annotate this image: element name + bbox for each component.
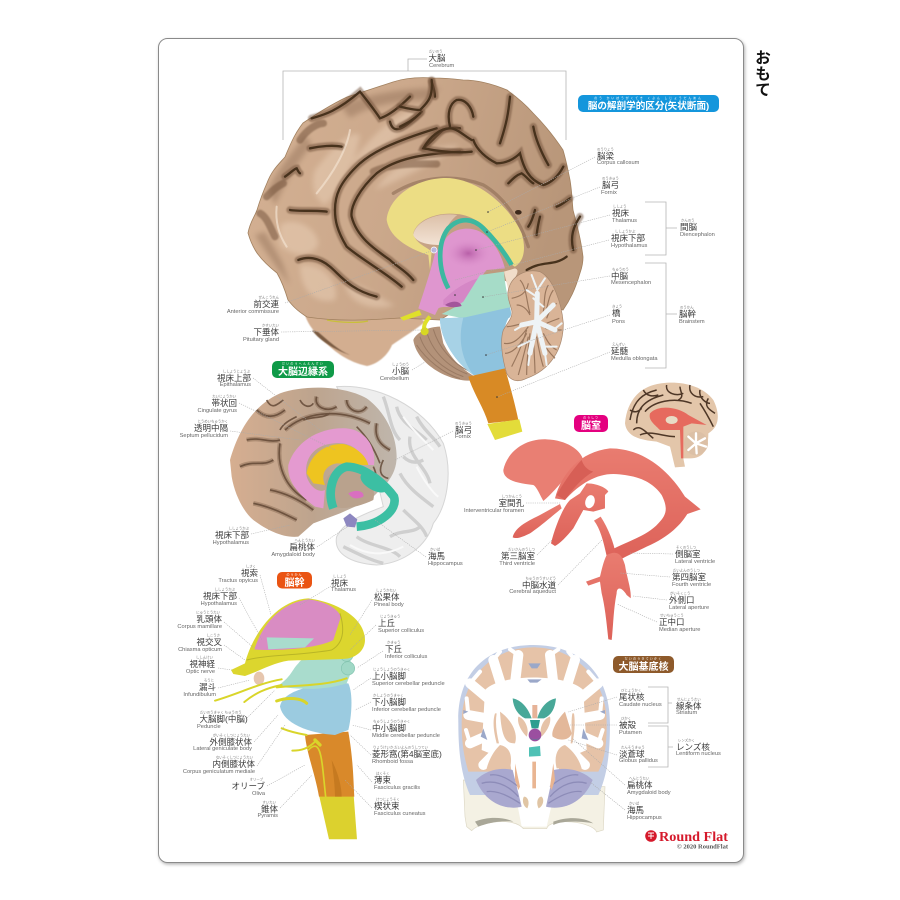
fourth ventricle and apertures bbox=[586, 553, 631, 640]
septum hollow bbox=[413, 214, 457, 245]
labels: brainstem left: Lateral geniculate body bbox=[193, 746, 252, 752]
anterior horn bbox=[513, 504, 562, 538]
labels: brainstem right: 下丘 bbox=[385, 644, 403, 654]
labels: brainstem left: しこうさ bbox=[206, 632, 220, 638]
cerebellar folia bbox=[504, 280, 562, 375]
sulci in right half bbox=[393, 80, 580, 270]
labels: ventricles: 正中口 bbox=[659, 617, 685, 627]
labels: main brain: 小脳 bbox=[392, 366, 409, 376]
heading: basal ganglia bbox=[613, 656, 674, 673]
labels: brainstem left: にゅうとうたい bbox=[196, 610, 221, 614]
labels: brainstem right: 上丘 bbox=[378, 618, 396, 628]
pons bbox=[440, 307, 511, 375]
labels: brainstem right: かきゅう bbox=[387, 640, 401, 644]
labels: brainstem left: Oliva bbox=[252, 791, 266, 797]
labels: brainstem left: Corpus geniculatum mediale bbox=[183, 769, 255, 775]
labels: brainstem left: 錐体 bbox=[261, 804, 278, 814]
labels: ventricles: Cerebral aqueduct bbox=[509, 589, 556, 595]
heading: basal ganglia: 大脳基底核 bbox=[618, 660, 668, 673]
labels: brainstem right: Middle cerebellar peduncle bbox=[372, 733, 440, 739]
labels: ventricles: だいさんのうしつ bbox=[508, 546, 536, 552]
inner thalamic pink bbox=[348, 491, 364, 498]
labels: main brain: 下垂体 bbox=[253, 327, 279, 337]
side label: front: お bbox=[755, 49, 771, 67]
third ventricle bbox=[551, 483, 608, 546]
cingulate ring bbox=[288, 428, 374, 508]
labels: brainstem left: Optic nerve bbox=[186, 669, 215, 675]
labels: main brain: Brainstem bbox=[679, 319, 705, 325]
labels: brainstem left: ないそくしつじょうたい bbox=[216, 754, 254, 760]
labels: ventricles: Interventricular foramen bbox=[464, 508, 524, 514]
arbor vitae bbox=[515, 275, 562, 365]
labels: limbic: 扁桃体 bbox=[289, 542, 315, 552]
labels: brainstem right: Inferior colliculus bbox=[385, 654, 428, 660]
brainstem bumps bbox=[523, 797, 543, 808]
labels: brainstem right: Inferior cerebellar peduncle bbox=[372, 707, 441, 713]
labels: brainstem right: 松果体 bbox=[374, 592, 400, 602]
labels: basal ganglia: Caudate nucleus bbox=[619, 702, 662, 708]
labels: basal ganglia: へんとうたい bbox=[629, 776, 650, 780]
labels: main brain: ししょう bbox=[613, 204, 627, 208]
beige tip bbox=[504, 268, 517, 290]
labels: main brain: Thalamus bbox=[612, 218, 637, 224]
labels: ventricles: しつかんこう bbox=[502, 494, 522, 498]
labels: main brain: かすいたい bbox=[262, 322, 280, 328]
lateral ventricle arch bbox=[555, 448, 701, 562]
cerebral aqueduct notch bbox=[445, 302, 462, 307]
logo: Round Flat bbox=[645, 829, 729, 850]
labels: ventricles: Fourth ventricle bbox=[672, 582, 711, 588]
teal ventricle bbox=[529, 720, 541, 740]
labels: main brain: 脳梁 bbox=[597, 151, 615, 161]
white cerebrum folds shade bbox=[343, 397, 440, 563]
pituitary bbox=[424, 317, 430, 332]
labels: main brain: Cerebrum bbox=[429, 63, 455, 69]
labels: limbic: Hippocampus bbox=[428, 561, 463, 567]
labels: brainstem left: オリーブ bbox=[250, 776, 264, 782]
illustration: inset brain with ventricles bbox=[625, 383, 718, 467]
labels: main brain: きょう bbox=[612, 304, 622, 308]
labels: brainstem right: けつじょうそく bbox=[376, 796, 400, 802]
labels: brainstem left: 視床下部 bbox=[203, 591, 237, 601]
labels: brainstem left: Peduncle bbox=[197, 724, 221, 730]
white cerebrum folds bbox=[350, 417, 438, 553]
labels: basal ganglia: かいば bbox=[629, 800, 640, 806]
labels: basal ganglia: Amygdaloid body bbox=[627, 790, 671, 796]
labels: main brain: ちゅうのう bbox=[612, 266, 629, 272]
labels: brainstem left: 乳頭体 bbox=[196, 614, 222, 624]
labels: brainstem left: すいたい bbox=[262, 800, 277, 804]
cerebellum left bbox=[476, 769, 522, 808]
labels: brainstem left: 視索 bbox=[241, 568, 258, 578]
labels: main brain: のうきゅう bbox=[602, 176, 619, 180]
labels: ventricles: Lateral ventricle bbox=[675, 559, 715, 565]
labels: basal ganglia: レンズ核 bbox=[676, 742, 710, 752]
illustration: limbic system brain bbox=[230, 386, 448, 565]
labels: brainstem right: りょうけいか だいよんのうしつてい bbox=[373, 744, 429, 750]
labels: brainstem left: 視交叉 bbox=[196, 637, 222, 647]
arch fold shade bbox=[557, 460, 593, 500]
fornix and hippocampus bbox=[331, 467, 395, 527]
heading: ventricles: 脳室 bbox=[581, 419, 601, 432]
side label: front: て bbox=[755, 82, 771, 99]
labels: main brain: Anterior commissure bbox=[227, 309, 279, 315]
heading: brainstem: 脳幹 bbox=[284, 576, 304, 589]
labels: main brain: 脳幹 bbox=[679, 309, 697, 319]
thalamus pink bbox=[418, 229, 505, 315]
labels: main brain: Cerebellum bbox=[380, 376, 409, 382]
cortex folds blue bbox=[463, 663, 605, 740]
blue meninges bbox=[458, 645, 610, 795]
labels: main brain: 橋 bbox=[612, 308, 621, 318]
limbic folds shade bbox=[240, 397, 390, 520]
labels: brainstem left: ろうと bbox=[204, 678, 214, 682]
labels: basal ganglia: レンズかく bbox=[678, 738, 695, 742]
labels: main brain: 視床 bbox=[612, 208, 630, 218]
labels: ventricles: 第四脳室 bbox=[672, 572, 707, 582]
labels: limbic: Cingulate gyrus bbox=[197, 408, 237, 414]
labels: brainstem left: だいのうきゃく ちゅうのう bbox=[200, 710, 242, 714]
labels: basal ganglia: 淡蒼球 bbox=[619, 749, 645, 759]
labels: main brain: 間脳 bbox=[680, 222, 698, 232]
central septum bbox=[532, 705, 537, 718]
labels: limbic: Fornix bbox=[455, 434, 471, 440]
side label: front bbox=[755, 49, 771, 99]
cortex bbox=[462, 647, 607, 772]
labels: main brain: 脳弓 bbox=[602, 180, 619, 190]
cerebrum bbox=[248, 78, 583, 320]
labels: brainstem right: Fasciculus gracilis bbox=[374, 785, 420, 791]
shell fold bbox=[247, 613, 343, 660]
putamen right bbox=[552, 712, 572, 740]
fornix body bbox=[357, 469, 391, 497]
labels: brainstem right: じょうきゅう bbox=[380, 614, 400, 618]
labels: brainstem right: Fasciculus cuneatus bbox=[374, 811, 426, 817]
lateral ventricle left lobe bbox=[503, 439, 583, 501]
labels: ventricles: Third ventricle bbox=[499, 561, 535, 567]
labels: limbic: 視床上部 bbox=[217, 373, 251, 383]
labels: basal ganglia: たんそうきゅう bbox=[621, 744, 645, 750]
labels: limbic: 帯状回 bbox=[211, 398, 237, 408]
labels: main brain: ししょうかぶ bbox=[615, 228, 636, 234]
medulla ridge bbox=[332, 760, 342, 797]
labels: limbic: Amygdaloid body bbox=[271, 552, 315, 558]
corpus callosum bbox=[307, 444, 368, 485]
illustration: main sagittal brain bbox=[248, 78, 583, 440]
aqueduct teal bbox=[529, 746, 541, 757]
amygdala bbox=[343, 513, 357, 527]
labels: main brain: 視床下部 bbox=[611, 233, 646, 243]
darker rims bbox=[255, 88, 440, 285]
labels: ventricles: 側脳室 bbox=[675, 549, 701, 559]
labels: ventricles: 第三脳室 bbox=[501, 551, 535, 561]
labels: brainstem right: 菱形窩(第4脳室底) bbox=[372, 749, 442, 759]
labels: brainstem left: ししょうかぶ bbox=[215, 586, 236, 592]
labels: brainstem right: ししょう bbox=[333, 574, 347, 578]
labels: brainstem left: がいそくしつじょうたい bbox=[213, 732, 251, 738]
labels: brainstem right: 視床 bbox=[331, 578, 349, 588]
labels: brainstem right: 薄束 bbox=[374, 775, 392, 785]
illustration: brainstem bbox=[215, 598, 365, 839]
labels: main brain: のうかん bbox=[680, 304, 694, 310]
heading: limbic system: 大脳辺縁系 bbox=[278, 365, 328, 378]
labels: main brain: えんずい bbox=[612, 342, 626, 346]
spinal tip bbox=[487, 419, 522, 440]
labels: limbic: ししょうかぶ bbox=[229, 526, 250, 530]
labels: limbic: 透明中隔 bbox=[194, 423, 228, 433]
labels: brainstem right: じょうしょうのうきゃく bbox=[373, 666, 410, 672]
heading: sagittal section bbox=[578, 95, 719, 112]
labels: brainstem left: 外側膝状体 bbox=[209, 737, 252, 747]
labels: limbic: 視床下部 bbox=[215, 530, 249, 540]
logo: Round Flat: © 2020 RoundFlat bbox=[677, 844, 729, 850]
labels: basal ganglia: 海馬 bbox=[627, 805, 644, 815]
labels: main brain bbox=[227, 48, 715, 382]
labels: main brain: だいのう bbox=[429, 48, 443, 54]
labels: brainstem left: Chiasma opticum bbox=[178, 647, 222, 653]
labels: main brain: Pituitary gland bbox=[243, 337, 279, 343]
labels: basal ganglia: Striatum bbox=[676, 710, 697, 716]
infundibulum bbox=[254, 672, 264, 685]
heading: ventricles bbox=[574, 414, 608, 432]
labels: limbic: Hypothalamus bbox=[213, 540, 249, 546]
limbic folds bbox=[240, 397, 390, 520]
labels: main brain: のうりょう bbox=[597, 146, 614, 152]
labels: basal ganglia bbox=[619, 688, 721, 821]
labels: limbic: Septum pellucidum bbox=[180, 433, 228, 439]
labels: ventricles: 室間孔 bbox=[498, 498, 524, 508]
labels: main brain: Diencephalon bbox=[680, 232, 715, 238]
cerebellum underside bbox=[413, 327, 475, 381]
heading: limbic system: だいのうへんえんけい bbox=[282, 360, 324, 366]
leader lines: main brain bbox=[281, 157, 610, 398]
spinal part bbox=[319, 795, 357, 839]
labels: brainstem left: 大脳脚(中脳) bbox=[200, 714, 248, 724]
white cerebrum bbox=[336, 386, 448, 565]
labels: basal ganglia: 尾状核 bbox=[619, 692, 645, 702]
labels: brainstem right bbox=[331, 574, 445, 817]
labels: brainstem right: 中小脳脚 bbox=[372, 723, 406, 733]
brown cerebrum bbox=[230, 388, 397, 537]
labels: ventricles: 中脳水道 bbox=[522, 580, 556, 590]
labels: brainstem right: 下小脳脚 bbox=[372, 697, 406, 707]
labels: ventricles: がいそくこう bbox=[670, 590, 690, 596]
central white core bbox=[482, 677, 587, 827]
labels: brainstem right: ちゅうしょうのうきゃく bbox=[373, 718, 410, 724]
labels: limbic bbox=[180, 368, 472, 567]
labels: brainstem left: Corpus mamillare bbox=[177, 624, 222, 630]
labels: brainstem left: Infundibulum bbox=[183, 692, 216, 698]
white matter branches bbox=[466, 649, 603, 765]
labels: main brain: Pons bbox=[612, 319, 625, 325]
leader lines: ventricles bbox=[526, 503, 673, 622]
interthalamic hole bbox=[584, 494, 596, 509]
medulla bbox=[305, 732, 354, 797]
labels: limbic: かいば bbox=[430, 546, 441, 552]
labels: brainstem left: ししんけい bbox=[196, 654, 214, 660]
labels: main brain: Corpus callosum bbox=[597, 160, 640, 166]
midbrain bbox=[277, 650, 353, 689]
underside shadow bbox=[312, 330, 350, 355]
labels: main brain: Hypothalamus bbox=[611, 243, 648, 249]
labels: main brain: 延髄 bbox=[611, 346, 629, 356]
heading: sagittal section: のう かいぼうがくてき くぶん しじょうだんめん bbox=[594, 95, 703, 100]
thalamus depression bbox=[445, 238, 492, 268]
labels: brainstem left: 内側膝状体 bbox=[212, 759, 255, 769]
heading: basal ganglia: だいのうきていかく bbox=[625, 656, 662, 660]
labels: basal ganglia: 扁桃体 bbox=[627, 780, 653, 790]
labels: brainstem right: Superior colliculus bbox=[378, 628, 424, 634]
labels: brainstem left bbox=[177, 564, 278, 819]
teal caudate bbox=[513, 698, 556, 718]
optic chiasm bbox=[400, 310, 422, 321]
labels: basal ganglia: びじょうかく bbox=[621, 688, 641, 692]
labels: basal ganglia: 線条体 bbox=[676, 701, 702, 711]
logo: Round Flat: Round Flat bbox=[659, 829, 729, 844]
commissure bbox=[431, 247, 437, 253]
labels: ventricles bbox=[464, 494, 715, 633]
heading: brainstem: のうかん bbox=[286, 572, 303, 576]
inner structures bbox=[325, 466, 374, 508]
labels: brainstem right: Rhomboid fossa bbox=[372, 759, 414, 765]
labels: brainstem right: しょうかたい bbox=[376, 588, 397, 592]
labels: brainstem left: Tractus opyicus bbox=[218, 578, 258, 584]
pons shade bbox=[440, 318, 473, 375]
bracket: cerebrum bbox=[283, 59, 566, 140]
labels: limbic: のうきゅう bbox=[455, 420, 472, 426]
labels: limbic: 海馬 bbox=[428, 551, 445, 561]
fornix bbox=[440, 220, 512, 288]
labels: main brain: 大脳 bbox=[428, 53, 446, 63]
labels: limbic: へんとうたい bbox=[295, 538, 316, 542]
labels: limbic: とうめいちゅうかく bbox=[197, 418, 228, 424]
labels: limbic: Epithalamus bbox=[220, 382, 251, 388]
labels: ventricles: せいちゅうこう bbox=[660, 612, 684, 618]
temporal cortex bbox=[487, 745, 582, 768]
aqueduct bbox=[594, 517, 616, 556]
labels: main brain: Mesencephalon bbox=[611, 280, 651, 286]
midline beige bbox=[515, 762, 555, 790]
labels: brainstem left: Hypothalamus bbox=[201, 601, 237, 607]
labels: ventricles: ちゅうのうすいどう bbox=[525, 576, 556, 580]
caudate beige bbox=[518, 717, 550, 737]
labels: brainstem left: Pyramis bbox=[257, 813, 278, 819]
labels: ventricles: そくのうしつ bbox=[676, 544, 697, 550]
labels: brainstem right: 上小脳脚 bbox=[372, 671, 406, 681]
labels: brainstem left: オリーブ bbox=[232, 781, 265, 791]
labels: basal ganglia: Globus pallidus bbox=[619, 758, 658, 764]
medulla oblongata bbox=[468, 368, 518, 423]
labels: basal ganglia: せんじょうたい bbox=[677, 696, 701, 702]
labels: limbic: たいじょうかい bbox=[212, 394, 237, 398]
labels: ventricles: だいよんのうしつ bbox=[673, 568, 700, 572]
heading: ventricles: のうしつ bbox=[583, 414, 599, 420]
heading: brainstem bbox=[277, 572, 312, 589]
sulci in left half bbox=[260, 82, 460, 297]
card bbox=[158, 38, 744, 862]
labels: limbic: ししょうじょうぶ bbox=[223, 368, 251, 374]
labels: basal ganglia: 被殻 bbox=[619, 720, 637, 730]
mesencephalon bbox=[442, 272, 511, 318]
heading: limbic system bbox=[272, 360, 334, 378]
labels: main brain: かんのう bbox=[681, 218, 695, 222]
colliculi bbox=[340, 649, 353, 661]
tracts bbox=[215, 678, 347, 797]
labels: brainstem right: かしょうのうきゃく bbox=[373, 692, 404, 698]
brackets: diencephalon and brainstem bbox=[645, 202, 677, 368]
leader lines: limbic bbox=[230, 378, 453, 557]
lower frontal lobe bbox=[305, 300, 425, 366]
labels: brainstem right: はくそく bbox=[376, 770, 390, 776]
labels: basal ganglia: Putamen bbox=[619, 730, 642, 736]
labels: main brain: しょうのう bbox=[392, 362, 409, 366]
hypothalamic band bbox=[443, 277, 482, 306]
side label: front: も bbox=[755, 65, 771, 83]
mint patch bbox=[267, 637, 314, 649]
labels: basal ganglia: Lentiform nucleus bbox=[676, 751, 721, 757]
labels: basal ganglia: ひかく bbox=[621, 716, 631, 720]
skull base shade bbox=[475, 818, 593, 827]
leader lines: brainstem bbox=[218, 575, 383, 808]
labels: brainstem right: Thalamus bbox=[331, 587, 356, 593]
labels: ventricles: 外側口 bbox=[669, 595, 695, 605]
labels: brainstem right: 楔状束 bbox=[374, 801, 400, 811]
labels: brainstem right: Superior cerebellar peduncle bbox=[372, 681, 445, 687]
labels: ventricles: Median aperture bbox=[659, 627, 700, 633]
skull base bbox=[463, 780, 605, 832]
putamen left bbox=[500, 712, 516, 743]
cerebellum section bbox=[502, 271, 563, 381]
third ventricle complex bbox=[529, 729, 541, 741]
thin green line on frontal lobe bbox=[327, 320, 368, 322]
pons bbox=[280, 683, 351, 735]
illustration: coronal section bbox=[458, 645, 610, 832]
labels: main brain: 前交連 bbox=[253, 299, 279, 309]
medial fissure bbox=[529, 647, 539, 677]
labels: main brain: ぜんこうれん bbox=[259, 294, 280, 300]
labels: main brain: 中脳 bbox=[611, 271, 629, 281]
brackets and leaders: basal ganglia bbox=[648, 687, 673, 767]
labels: basal ganglia: Hippocampus bbox=[627, 815, 662, 821]
corpus callosum bbox=[387, 178, 524, 270]
heading: sagittal section: 脳の解剖学的区分(矢状断面) bbox=[588, 100, 709, 112]
illustration: ventricular system bbox=[503, 439, 701, 640]
labels: brainstem right: Pineal body bbox=[374, 602, 404, 608]
labels: brainstem left: しさく bbox=[246, 564, 256, 568]
labels: brainstem left: 漏斗 bbox=[199, 682, 216, 692]
cerebellum right bbox=[546, 769, 593, 808]
cerebellar stripes bbox=[482, 775, 587, 803]
gyri highlights bbox=[280, 105, 460, 308]
insular bbox=[494, 713, 575, 743]
thalamus pink bbox=[254, 599, 341, 650]
labels: ventricles: Lateral aperture bbox=[669, 605, 709, 611]
labels: main brain: Fornix bbox=[601, 190, 617, 196]
labels: limbic: 脳弓 bbox=[455, 425, 472, 435]
labels: brainstem left: 視神経 bbox=[189, 659, 215, 669]
yellow shell bbox=[231, 598, 365, 676]
labels: main brain: Medulla oblongata bbox=[611, 356, 658, 362]
